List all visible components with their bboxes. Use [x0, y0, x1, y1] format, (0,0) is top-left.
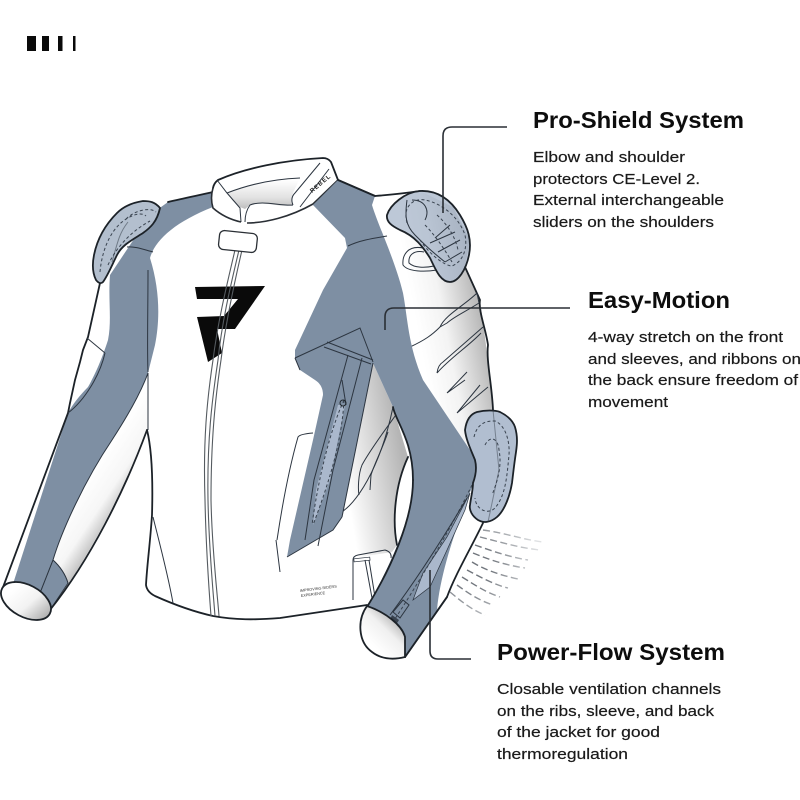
zipper pull	[218, 230, 258, 253]
text: Pro-Shield System: External interchangeable	[533, 192, 724, 209]
logo mark	[195, 286, 265, 362]
text: Pro-Shield System: Pro-Shield System	[533, 107, 744, 133]
right shoulder protector	[387, 191, 470, 282]
text: Pro-Shield System: Elbow and shoulder	[533, 149, 685, 166]
text: Power-Flow System: on the ribs, sleeve, and back	[497, 703, 715, 720]
text: Power-Flow System: Closable ventilation channels	[497, 681, 721, 698]
text: Power-Flow System	[497, 639, 725, 763]
text: Easy-Motion: the back ensure freedom of	[588, 372, 799, 389]
text: Power-Flow System: Power-Flow System	[497, 639, 725, 665]
left shoulder protector	[93, 201, 160, 283]
callout line: Easy-Motion	[385, 308, 570, 330]
jacket illustration	[0, 158, 543, 659]
hem text: IMPROVING RIDERS	[300, 584, 337, 593]
text: Pro-Shield System: sliders on the shoulders	[533, 214, 714, 231]
text: Power-Flow System: of the jacket for good	[497, 724, 660, 741]
hem text	[300, 584, 337, 598]
text: Easy-Motion: and sleeves, and ribbons on	[588, 351, 800, 368]
text: Easy-Motion: movement	[588, 394, 669, 411]
text: Power-Flow System: thermoregulation	[497, 746, 628, 763]
elbow protector	[465, 410, 517, 522]
airflow dashes	[450, 530, 543, 615]
side ventilation zipper	[312, 380, 346, 525]
text: Easy-Motion: Easy-Motion	[588, 287, 730, 313]
callout line: Pro-Shield	[443, 127, 507, 213]
text: Pro-Shield System: protectors CE-Level 2.	[533, 171, 700, 188]
collar	[212, 158, 338, 223]
text: Pro-Shield System	[533, 107, 744, 231]
left cuff	[0, 574, 57, 628]
back arm white area	[338, 180, 493, 460]
callout line: Power-Flow	[430, 570, 471, 659]
body side under panel	[276, 363, 408, 600]
torso outline	[146, 373, 367, 619]
collar band brand text: REBEL	[309, 174, 333, 195]
text: Easy-Motion: 4-way stretch on the front	[588, 329, 784, 346]
text: Easy-Motion	[588, 287, 800, 411]
front zipper	[204, 250, 242, 616]
right cuff	[360, 606, 405, 659]
gray panel and right sleeve	[287, 180, 483, 659]
hem text: EXPERIENCE	[301, 591, 326, 598]
sleeve ventilation	[389, 485, 472, 627]
left sleeve	[0, 192, 213, 628]
brand logo bars	[27, 36, 76, 51]
